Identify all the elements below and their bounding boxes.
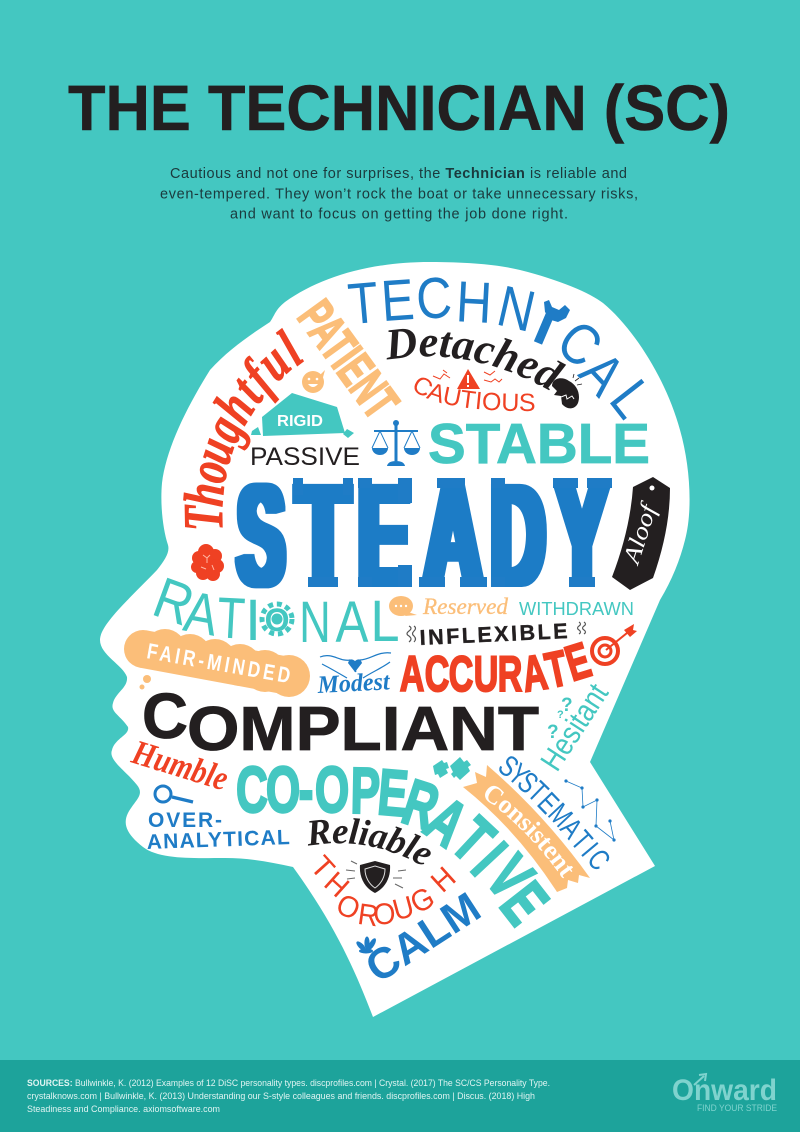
word: RATIONAL with gear: I	[245, 588, 261, 653]
word: SYSTEMATIC: Y	[502, 757, 536, 792]
word: CAUTIOUS: CAUTIOUS	[414, 378, 534, 412]
word: Detached: Detached	[386, 328, 566, 390]
word: RATIONAL with gear: R	[145, 565, 202, 638]
word: ACCURATE	[400, 632, 597, 703]
word: THOROUGH: U	[389, 891, 418, 928]
word: RATIONAL with gear: A	[336, 590, 369, 655]
word: Thoughtful: h	[201, 381, 267, 433]
word: SYSTEMATIC: M	[542, 797, 579, 833]
word: CO-OPERATIVE: E	[375, 755, 411, 830]
word: Thoughtful: T	[172, 504, 235, 531]
word: CO-OPERATIVE: R	[394, 765, 447, 844]
word: TECHNICAL with wrench	[345, 265, 665, 430]
tag: Aloof	[612, 477, 670, 590]
word: ACCURATE: A	[400, 647, 424, 703]
word: Thoughtful: g	[190, 405, 256, 451]
word: CO-OPERATIVE: -	[299, 754, 313, 826]
word: STEADY: A	[424, 454, 482, 616]
word: THOROUGH: H	[318, 866, 355, 904]
word: THOROUGH: O	[331, 888, 365, 927]
word: CO-OPERATIVE	[236, 754, 562, 937]
icon: question marks: ?	[561, 695, 573, 716]
word: Thoughtful: f	[230, 348, 287, 404]
word: TECHNICAL with wrench: N	[492, 274, 541, 345]
banner: Consistent	[463, 765, 590, 892]
word: SYSTEMATIC: I	[575, 836, 605, 863]
icon: question marks	[547, 695, 573, 743]
word: SYSTEMATIC: A	[554, 811, 589, 845]
word: OVER-ANALYTICAL: OVER-	[148, 809, 222, 832]
word: THOROUGH: R	[356, 898, 381, 934]
icon: question marks: ?	[547, 722, 559, 743]
word: SYSTEMATIC	[492, 748, 617, 877]
word: TECHNICAL with wrench: T	[345, 270, 381, 337]
word: OVER-ANALYTICAL	[146, 809, 290, 854]
sources text: SOURCES: Bullwinkle, K. (2012) Examples of 12 DiSC personality types. discprofiles.com | Crystal. (2017) The SC/CS Personality Type.	[27, 1078, 550, 1088]
word: TECHNICAL with wrench: A	[567, 340, 637, 408]
word: Reliable: Reliable	[308, 818, 431, 864]
intro paragraph: even-tempered. They won’t rock the boat or take unnecessary risks,	[160, 186, 638, 202]
word: Thoughtful: u	[243, 330, 302, 392]
word: ACCURATE: R	[498, 647, 522, 703]
word: STEADY: Y	[558, 456, 606, 616]
icon: smiley speech bubble	[302, 370, 325, 393]
word: THOROUGH: T	[304, 850, 340, 885]
cloud: FAIR-MINDED	[124, 629, 310, 697]
word: RATIONAL with gear: O	[265, 602, 289, 638]
word: Humble: Humble	[127, 732, 233, 798]
word: ACCURATE: T	[541, 640, 573, 700]
word: CO-OPERATIVE: I	[459, 830, 520, 888]
word: TECHNICAL with wrench: C	[415, 265, 453, 332]
icon: scales of justice	[372, 420, 420, 466]
word: THOROUGH	[304, 850, 462, 934]
word: COMPLIANT: C	[142, 680, 188, 752]
icon: lotus	[355, 936, 378, 954]
word: STEADY: S	[237, 455, 285, 617]
word: SYSTEMATIC: T	[564, 824, 599, 857]
icon: wrench head	[544, 300, 570, 322]
head silhouette	[100, 262, 690, 1017]
word: TECHNICAL with wrench: C	[545, 308, 614, 380]
label: FAIR-MINDED: FAIR-MINDED	[145, 639, 292, 689]
word: ACCURATE: C	[425, 647, 449, 703]
word: Thoughtful: l	[266, 319, 313, 376]
word: THOROUGH: G	[405, 881, 440, 921]
intro paragraph: and want to focus on getting the job done right.	[230, 206, 568, 222]
icon: shield with rays	[346, 861, 406, 893]
word: Thoughtful: h	[172, 480, 237, 508]
word: STABLE: STABLE	[428, 412, 650, 476]
word: SYSTEMATIC: E	[531, 786, 566, 820]
label: Aloof: Aloof	[618, 498, 663, 569]
word: ACCURATE: C	[449, 647, 473, 703]
word: CO-OPERATIVE: E	[487, 869, 562, 937]
icon: warning triangle with zigzags	[433, 369, 502, 389]
word: RATIONAL with gear	[145, 565, 400, 655]
icon: constellation	[564, 779, 616, 842]
word: CO-OPERATIVE: P	[350, 754, 381, 827]
word: CALM: CALM	[357, 884, 489, 992]
logo: Onward: Onward	[672, 1074, 777, 1107]
word: THOROUGH: H	[425, 861, 462, 899]
sources text	[27, 1078, 550, 1114]
word: TECHNICAL with wrench: H	[455, 269, 493, 336]
icon: puzzle pieces	[433, 757, 471, 780]
logo tagline: FIND YOUR STRIDE	[697, 1103, 777, 1114]
sources text: crystalknows.com | Bullwinkle, K. (2013) Understanding our S-style colleagues and friends. discprofiles.com | Discus. (2018) High	[27, 1091, 535, 1101]
icon: speech bubble	[389, 596, 417, 616]
title: THE TECHNICIAN (SC)	[68, 72, 730, 144]
icon: hands holding heart	[320, 653, 391, 678]
word: CO-OPERATIVE: C	[236, 754, 268, 826]
word: Modest: Modest	[316, 668, 391, 699]
word: STEADY: D	[491, 456, 545, 616]
word: PASSIVE: PASSIVE	[250, 443, 360, 471]
word: TECHNICAL with wrench: I	[526, 299, 563, 356]
word: ACCURATE: U	[474, 647, 498, 703]
word: SYSTEMATIC: S	[511, 765, 545, 800]
word: TECHNICAL with wrench: E	[379, 267, 416, 334]
intro paragraph	[160, 166, 638, 222]
word: CO-OPERATIVE: O	[315, 754, 349, 826]
word: PATIENT: PATIENT	[287, 290, 410, 429]
word: COMPLIANT: OMPLIANT	[187, 695, 539, 764]
word: ACCURATE: E	[559, 632, 597, 692]
word: CO-OPERATIVE: T	[439, 804, 508, 875]
logo arrow	[694, 1074, 706, 1085]
word: CO-OPERATIVE: O	[266, 754, 300, 826]
word: ACCURATE: A	[519, 644, 551, 703]
icon: cracked balloon	[552, 374, 582, 408]
word: STEADY: E	[358, 454, 410, 616]
word: Hesitant: Hesitant	[534, 677, 615, 777]
icon: gear teeth	[262, 604, 292, 634]
word: CO-OPERATIVE: A	[413, 783, 481, 861]
word: Thoughtful: t	[218, 365, 275, 413]
word: CO-OPERATIVE: V	[473, 842, 547, 911]
icon: magnifying glass	[155, 786, 193, 802]
word: RATIONAL with gear: A	[180, 579, 223, 649]
word: Thoughtful	[172, 319, 313, 531]
word: Reserved: Reserved	[422, 594, 508, 619]
word: SYSTEMATIC: T	[521, 775, 555, 809]
word: INFLEXIBLE with squiggles: INFLEXIBLE	[419, 619, 568, 650]
word: Thoughtful: o	[175, 455, 240, 488]
icon: brain	[191, 544, 224, 581]
word: TECHNICAL with wrench: L	[597, 368, 665, 430]
word: Thoughtful: u	[180, 430, 246, 471]
icon: question marks: ?	[557, 709, 564, 721]
label: Consistent: Consistent	[485, 786, 573, 878]
rigid block	[251, 393, 354, 438]
word: STEADY	[237, 454, 612, 617]
label: RIGID: RIGID	[277, 413, 323, 430]
word: THOROUGH: O	[373, 898, 396, 932]
word: SYSTEMATIC: C	[581, 843, 617, 877]
sources text: Steadiness and Compliance. axiomsoftware.com	[27, 1104, 220, 1114]
word: RATIONAL with gear: T	[216, 586, 246, 652]
word: RATIONAL with gear: L	[370, 588, 400, 654]
word: WITHDRAWN: WITHDRAWN	[519, 598, 634, 619]
word: STEADY: T	[296, 456, 350, 616]
icon: target with arrow	[592, 624, 637, 664]
word: RATIONAL with gear: N	[299, 590, 331, 654]
footer band	[0, 1060, 800, 1132]
word: SYSTEMATIC: S	[492, 748, 525, 784]
word: OVER-ANALYTICAL: ANALYTICAL	[146, 826, 290, 854]
intro paragraph: Cautious and not one for surprises, the Technician is reliable and	[170, 166, 627, 182]
